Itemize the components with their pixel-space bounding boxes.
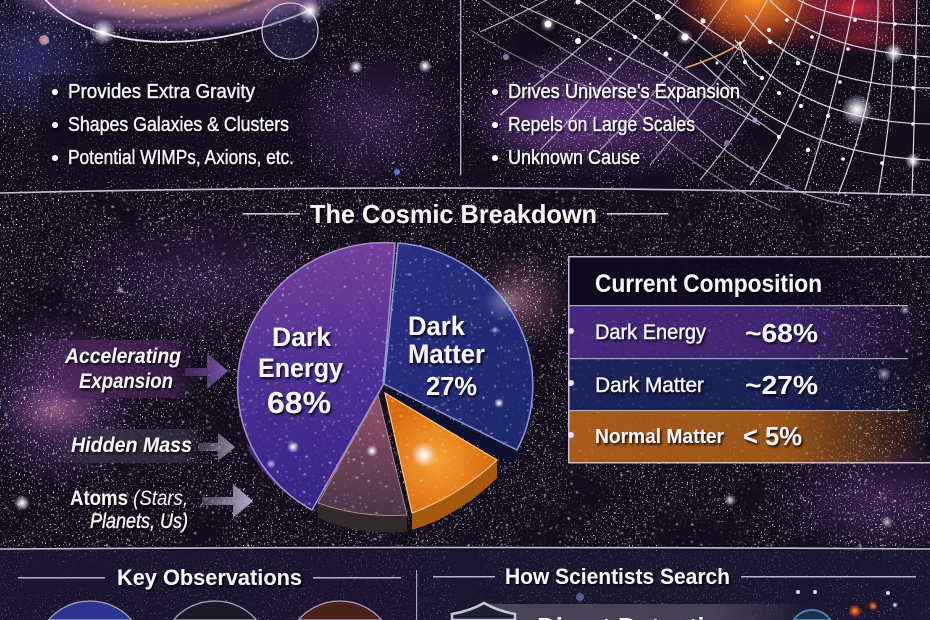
panel: current composition table bbox=[568, 256, 930, 464]
row: direct detection bbox=[452, 603, 810, 620]
pie chart bbox=[230, 240, 533, 532]
icon: dark star field sphere bbox=[173, 601, 257, 620]
slice: stars and atoms bbox=[385, 393, 500, 530]
divider between bottom panels bbox=[416, 570, 417, 620]
icon: detector globe bbox=[794, 610, 830, 620]
callout: accelerating expansion: Expansion bbox=[79, 370, 173, 393]
callout: accelerating expansion bbox=[40, 340, 228, 398]
bullet list: dark energy: Drives Universe's Expansion bbox=[508, 81, 740, 103]
bullet list: dark energy: Unknown Cause bbox=[508, 147, 640, 169]
bullet list: dark matter: Provides Extra Gravity bbox=[68, 81, 255, 103]
panel: dark matter bbox=[0, 0, 360, 180]
top section rule bbox=[0, 188, 930, 195]
illustration: galaxy with orbit and bubble bbox=[0, 0, 360, 59]
bullet list: dark energy: Repels on Large Scales bbox=[508, 114, 695, 136]
callout: atoms bbox=[70, 484, 253, 533]
panel: how scientists search bbox=[433, 564, 916, 620]
row: normal matter bbox=[595, 421, 802, 451]
bullet list: dark matter bbox=[52, 81, 294, 169]
slice: dark energy bbox=[230, 240, 400, 515]
slice: dark matter bbox=[380, 240, 533, 465]
panel: dark energy bbox=[470, 0, 930, 210]
divider between top panels bbox=[460, 0, 461, 175]
pie labels: Energy bbox=[258, 353, 343, 383]
table heading: Current Composition bbox=[595, 270, 822, 298]
pie labels: Dark bbox=[272, 322, 332, 352]
icon: nebula sphere bbox=[298, 601, 382, 620]
bullet list: dark matter: Potential WIMPs, Axions, etc. bbox=[68, 147, 294, 169]
row: normal matter: Normal Matter bbox=[595, 426, 724, 448]
callout: atoms: Planets, Us) bbox=[90, 510, 188, 533]
middle section rule bbox=[0, 548, 930, 549]
row: dark energy bbox=[595, 318, 818, 348]
decorative sparks bbox=[576, 590, 898, 618]
heading: the cosmic breakdown: The Cosmic Breakdown bbox=[310, 199, 597, 229]
pie labels bbox=[258, 311, 485, 420]
callout: hidden mass bbox=[50, 429, 235, 463]
illustration: warped spacetime grid bbox=[470, 0, 930, 210]
row: dark matter: Dark Matter bbox=[595, 374, 704, 397]
bullet list: dark energy bbox=[492, 81, 740, 169]
bullet list: dark matter: Shapes Galaxies & Clusters bbox=[68, 114, 289, 136]
pie labels: Matter bbox=[408, 339, 485, 369]
callout: hidden mass: Hidden Mass bbox=[71, 434, 192, 457]
row: normal matter: < 5% bbox=[743, 421, 802, 451]
row: dark energy: ~68% bbox=[745, 318, 818, 348]
heading: key observations: Key Observations bbox=[117, 565, 302, 590]
pie labels: 68% bbox=[267, 385, 331, 420]
callout: accelerating expansion: Accelerating bbox=[64, 345, 181, 368]
panel: key observations bbox=[18, 565, 401, 620]
slice: normal matter bbox=[315, 393, 410, 532]
pie labels: 27% bbox=[426, 371, 477, 401]
row: dark energy: Dark Energy bbox=[595, 321, 706, 344]
row: dark matter: ~27% bbox=[745, 370, 818, 400]
heading: how scientists search: How Scientists Search bbox=[505, 564, 730, 589]
callouts: left labels with arrows bbox=[40, 340, 253, 533]
text band bbox=[40, 75, 310, 180]
callout: atoms: Atoms (Stars, bbox=[70, 487, 188, 510]
icon: galaxy lensing sphere bbox=[48, 601, 132, 620]
row: dark matter bbox=[595, 370, 818, 400]
pie labels: Dark bbox=[408, 311, 466, 341]
